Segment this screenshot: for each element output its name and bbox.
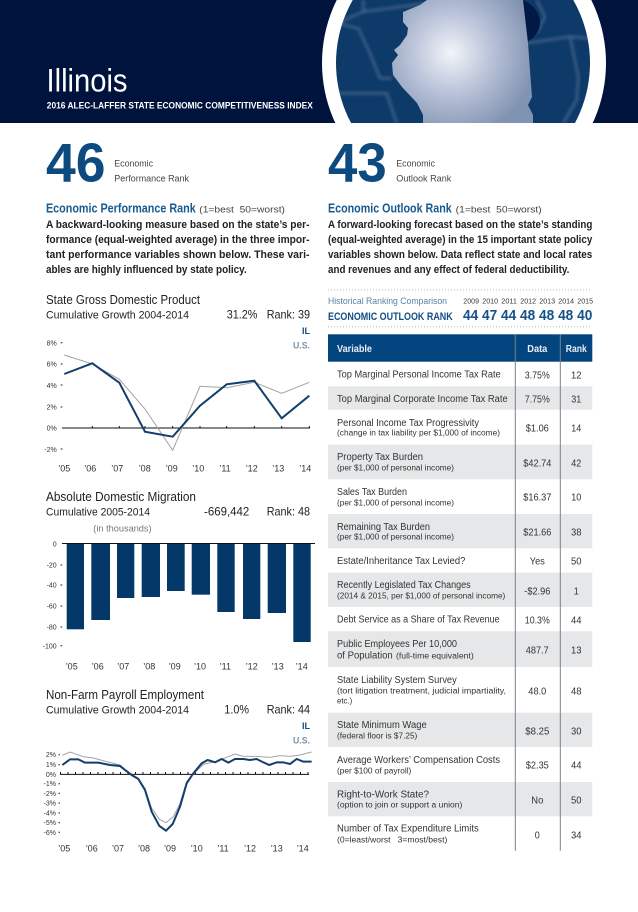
row: estate tax: Estate/Inheritance Tax Levied? <box>337 556 466 567</box>
legend: IL <box>302 721 311 731</box>
description: tant performance variables shown below. These vari- <box>46 249 310 261</box>
row: workers compensation: $2.35 <box>526 760 549 772</box>
outlook rank label: ECONOMIC OUTLOOK RANK <box>328 311 453 323</box>
line chart: ’10 <box>191 843 203 853</box>
row: income tax progressivity: 14 <box>571 422 581 434</box>
bar chart: ’14 <box>296 662 308 672</box>
bar chart: ’07 <box>117 662 129 672</box>
line chart: ’11 <box>217 843 229 853</box>
chart heading <box>46 489 310 518</box>
bar chart: ’08 <box>143 662 155 672</box>
line chart: -4% <box>44 810 56 818</box>
years: 2012 <box>520 297 536 306</box>
table: state policy variables <box>328 334 592 851</box>
row: property tax burden: $42.74 <box>523 457 551 469</box>
line chart: 0% <box>46 772 56 779</box>
comparison label: Historical Ranking Comparison <box>328 296 447 307</box>
row: public employees: 487.7 <box>526 644 549 656</box>
description: A forward-looking forecast based on the state’s standing <box>328 219 592 231</box>
years: 2010 <box>482 297 498 306</box>
heading: Economic Outlook Rank <box>328 201 452 216</box>
bar chart: ’11 <box>220 662 231 672</box>
line chart <box>44 752 312 853</box>
row: right to work: (option to join or support a union) <box>337 801 463 810</box>
row: minimum wage: 30 <box>571 725 582 737</box>
row: tax expenditure limits: Number of Tax Expenditure Limits <box>337 824 479 835</box>
line chart: 2% <box>46 752 56 759</box>
rank history values: 44 47 44 48 48 48 40 <box>463 307 592 324</box>
row: personal income tax rate <box>337 369 582 381</box>
row: remaining tax burden: (per $1,000 of personal income) <box>337 533 454 542</box>
row: remaining tax burden <box>337 522 582 542</box>
row: minimum wage <box>337 720 582 741</box>
row: property tax burden <box>337 452 581 473</box>
row: public employees: Public Employees Per 10,000 <box>337 639 457 650</box>
title: Illinois <box>46 62 128 98</box>
header banner <box>0 0 638 123</box>
bar chart: -60 <box>47 604 57 611</box>
years: 2015 <box>577 297 593 306</box>
line chart: ’14 <box>297 843 309 853</box>
row: income tax progressivity: $1.06 <box>526 422 549 434</box>
line chart: ’09 <box>164 843 176 853</box>
row: public employees <box>337 639 582 662</box>
row: recently legislated changes: Recently Legislated Tax Changes <box>337 580 471 591</box>
line chart: ’09 <box>166 464 178 474</box>
big number 43: 43 <box>328 132 387 194</box>
row: minimum wage: State Minimum Wage <box>337 720 427 731</box>
row: corporate income tax rate <box>337 393 581 405</box>
panel: payroll employment chart <box>44 687 312 853</box>
row: tax expenditure limits <box>337 824 582 845</box>
chart heading: Cumulative Growth 2004-2014 <box>46 309 189 321</box>
row: sales tax burden <box>337 487 581 508</box>
row: public employees: 13 <box>571 644 582 656</box>
row: right to work <box>337 790 582 810</box>
years <box>463 297 593 306</box>
line chart: ’08 <box>139 464 151 474</box>
bar chart: -20 <box>47 563 57 570</box>
row: sales tax burden: $16.37 <box>523 491 551 503</box>
heading: (1=best 50=worst) <box>199 205 285 216</box>
years: 2013 <box>539 297 555 306</box>
row: recently legislated changes <box>337 580 579 601</box>
line chart: ’13 <box>271 843 283 853</box>
row: property tax burden: Property Tax Burden <box>337 452 423 463</box>
row: recently legislated changes: (2014 & 2015, per $1,000 of personal income) <box>337 592 506 601</box>
line chart: -1% <box>44 781 56 788</box>
chart heading: Rank: 39 <box>267 307 310 321</box>
row: workers compensation: (per $100 of payroll) <box>337 767 412 776</box>
line chart: ’06 <box>84 464 96 474</box>
row: debt service <box>337 614 582 626</box>
row: corporate income tax rate: 31 <box>571 393 581 405</box>
legend <box>293 326 311 350</box>
line chart: ’07 <box>112 843 124 853</box>
bar chart: 0 <box>53 542 57 548</box>
line chart: -2% <box>44 791 56 798</box>
row: sales tax burden: 10 <box>571 491 581 503</box>
row: liability survey: 48 <box>571 685 582 697</box>
chart heading <box>46 687 310 716</box>
chart heading: -669,442 <box>204 504 250 518</box>
chart heading: Rank: 44 <box>267 702 310 716</box>
row: right to work: Right-to-Work State? <box>337 790 429 801</box>
bar chart: ’12 <box>246 662 258 672</box>
chart heading: 31.2% <box>227 307 258 321</box>
description <box>46 219 310 276</box>
row: recently legislated changes: 1 <box>574 585 579 597</box>
row: estate tax <box>337 555 582 567</box>
chart heading: Absolute Domestic Migration <box>46 489 196 504</box>
table header <box>328 334 592 362</box>
row: personal income tax rate: Top Marginal Personal Income Tax Rate <box>337 370 501 381</box>
row: estate tax: 50 <box>571 555 582 567</box>
row: corporate income tax rate: 7.75% <box>525 393 550 405</box>
description: and revenues and any effect of federal deductibility. <box>328 264 569 276</box>
description: variables shown below. Data reflect state and local rates <box>328 249 592 261</box>
bar chart <box>43 542 315 672</box>
rank caption: Performance Rank <box>114 174 189 184</box>
row: sales tax burden: (per $1,000 of personal income) <box>337 499 454 508</box>
panel: gross domestic product chart <box>44 292 311 474</box>
line chart: 8% <box>47 340 57 348</box>
line chart: -3% <box>44 800 56 808</box>
chart heading <box>46 292 310 321</box>
table header: Variable <box>337 344 372 355</box>
legend <box>293 721 311 745</box>
legend: U.S. <box>293 340 310 350</box>
heading: Economic Performance Rank <box>46 201 196 216</box>
rank caption: Economic <box>396 159 435 169</box>
line chart: 1% <box>46 762 56 769</box>
bar chart: -40 <box>47 583 57 590</box>
bar chart: -100 <box>43 643 57 650</box>
row: right to work: 50 <box>571 794 582 806</box>
row: workers compensation: Average Workers’ Compensation Costs <box>337 755 500 766</box>
table header: Rank <box>566 344 587 355</box>
line chart: 6% <box>47 362 57 369</box>
row: property tax burden: (per $1,000 of personal income) <box>337 464 454 473</box>
row: right to work: No <box>531 794 543 806</box>
bar chart: ’10 <box>194 662 206 672</box>
panel: economic outlook rank <box>328 132 593 276</box>
bar chart: ’09 <box>169 662 181 672</box>
line chart: ’07 <box>111 464 123 474</box>
row: property tax burden: 42 <box>571 457 581 469</box>
line chart: 2% <box>47 404 57 412</box>
row: debt service: 44 <box>571 614 582 626</box>
bar chart: ’13 <box>272 662 284 672</box>
line chart: ’12 <box>246 464 258 474</box>
row: tax expenditure limits: (0=least/worst 3=most/best) <box>337 836 448 845</box>
row: sales tax burden: Sales Tax Burden <box>337 487 407 498</box>
line chart: ’06 <box>86 843 98 853</box>
row: minimum wage: $8.25 <box>525 725 549 737</box>
row: income tax progressivity: (change in tax liability per $1,000 of income) <box>337 429 500 438</box>
line chart: ’05 <box>58 843 70 853</box>
description: formance (equal-weighted average) in the three impor- <box>46 234 310 246</box>
description: ables are highly influenced by state policy. <box>46 264 247 276</box>
line chart: -6% <box>44 830 56 837</box>
line chart: ’11 <box>219 464 231 474</box>
table header: Data <box>527 344 548 355</box>
row: tax expenditure limits: 0 <box>535 829 540 841</box>
row: liability survey: (tort litigation treatment, judicial impartiality, <box>337 687 506 696</box>
line chart: ’12 <box>244 843 256 853</box>
panel: economic performance rank <box>46 132 310 276</box>
row: income tax progressivity <box>337 418 581 438</box>
bar chart: ’05 <box>66 662 78 672</box>
row: remaining tax burden: Remaining Tax Burden <box>337 522 430 533</box>
icon: Illinois state map in a circle <box>322 0 606 123</box>
row: liability survey: State Liability System Survey <box>337 675 457 686</box>
row: remaining tax burden: 38 <box>571 526 582 538</box>
row: public employees: (full-time equivalent) <box>396 652 474 661</box>
row: recently legislated changes: -$2.96 <box>524 585 550 597</box>
row: corporate income tax rate: Top Marginal Corporate Income Tax Rate <box>337 394 508 405</box>
rank caption: Outlook Rank <box>396 174 452 184</box>
bar chart: -80 <box>47 625 57 632</box>
rank caption: Economic <box>114 159 153 169</box>
description <box>328 219 593 276</box>
row: debt service: Debt Service as a Share of Tax Revenue <box>337 615 500 626</box>
row: workers compensation <box>337 755 582 776</box>
row: personal income tax rate: 3.75% <box>525 369 550 381</box>
row: estate tax: Yes <box>530 555 545 567</box>
years: 2014 <box>558 297 574 306</box>
chart heading: Cumulative Growth 2004-2014 <box>46 704 189 716</box>
chart heading: State Gross Domestic Product <box>46 292 200 307</box>
years: 2009 <box>463 297 479 306</box>
historical ranking comparison <box>328 290 593 327</box>
row: income tax progressivity: Personal Income Tax Progressivity <box>337 418 479 429</box>
heading: (1=best 50=worst) <box>456 205 542 216</box>
chart heading: Cumulative 2005-2014 <box>46 506 150 518</box>
unit note: (in thousands) <box>93 524 152 534</box>
chart heading: Non-Farm Payroll Employment <box>46 687 204 702</box>
line chart: ’10 <box>192 464 204 474</box>
row: tax expenditure limits: 34 <box>571 829 582 841</box>
row: remaining tax burden: $21.66 <box>523 526 551 538</box>
description: A backward-looking measure based on the state’s per- <box>46 219 310 231</box>
line chart: ’08 <box>138 843 150 853</box>
rank caption <box>114 159 189 184</box>
row: workers compensation: 44 <box>571 760 582 772</box>
line chart: -2% <box>44 447 57 454</box>
bar chart: ’06 <box>92 662 104 672</box>
line chart: ’14 <box>299 464 311 474</box>
subtitle: 2016 ALEC-LAFFER STATE ECONOMIC COMPETITIVENESS INDEX <box>47 101 313 112</box>
rank caption <box>396 159 452 184</box>
line chart: 0% <box>47 426 57 433</box>
chart heading: 1.0% <box>224 702 249 716</box>
big number 46: 46 <box>46 132 106 194</box>
line chart: 4% <box>47 383 57 390</box>
legend: U.S. <box>293 735 310 745</box>
years: 2011 <box>501 297 517 306</box>
row: liability survey <box>337 675 582 706</box>
description: (equal-weighted average) in the 15 important state policy <box>328 234 593 246</box>
row: liability survey: etc.) <box>337 697 353 706</box>
line chart: -5% <box>44 820 56 827</box>
row: minimum wage: (federal floor is $7.25) <box>337 732 418 741</box>
row: liability survey: 48.0 <box>528 685 546 697</box>
panel: domestic migration chart <box>43 489 315 672</box>
line chart: ’05 <box>58 464 70 474</box>
row: public employees: of Population <box>337 651 393 662</box>
legend: IL <box>302 326 311 336</box>
chart heading: Rank: 48 <box>267 504 310 518</box>
line chart <box>44 340 311 474</box>
row: debt service: 10.3% <box>525 614 550 626</box>
line chart: ’13 <box>272 464 284 474</box>
row: personal income tax rate: 12 <box>571 369 582 381</box>
